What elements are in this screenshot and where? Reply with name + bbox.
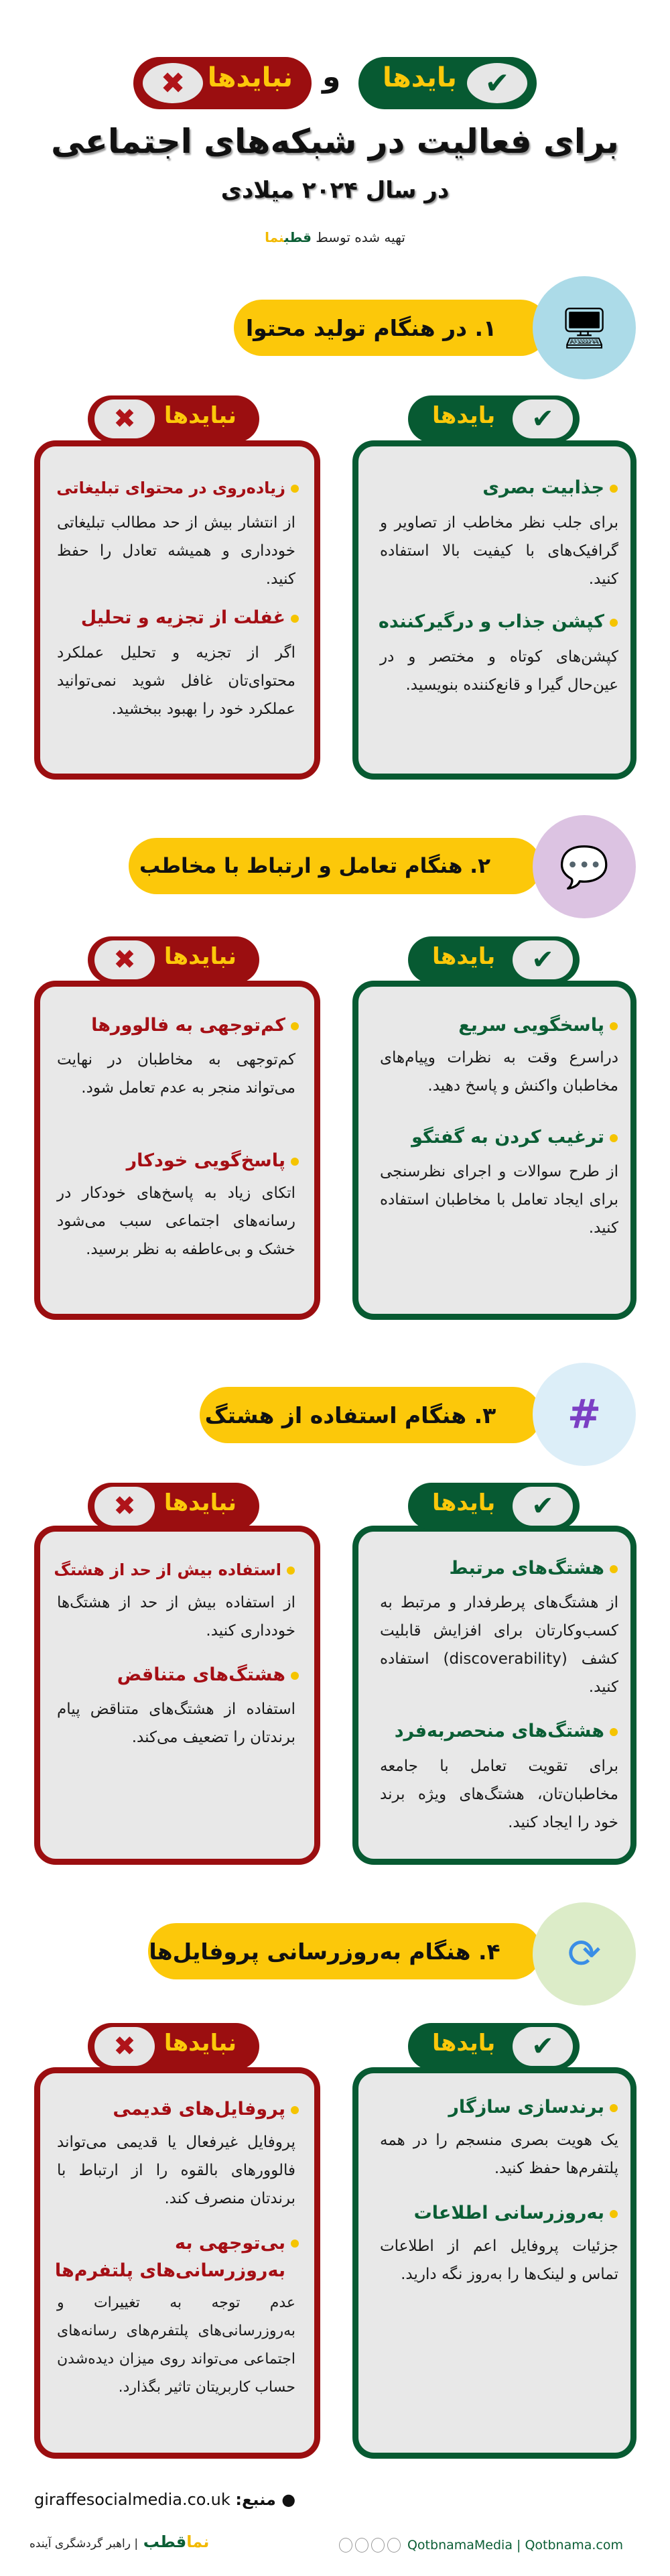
pill: dos: ✔ bbox=[485, 66, 509, 101]
section 1 header bbox=[234, 276, 636, 379]
panel: section 1 dos: کپشن جذاب و درگیرکننده bbox=[379, 611, 604, 632]
panel: section 4 donts: نبایدها bbox=[164, 2030, 237, 2057]
panel: section 2 dos: بایدها bbox=[432, 943, 495, 970]
text: and: و bbox=[322, 60, 340, 94]
pill: dos: بایدها bbox=[383, 62, 457, 93]
panel: section 1 donts: غفلت از تجزیه و تحلیل bbox=[81, 607, 285, 628]
section 1 header: ۱. در هنگام تولید محتوا bbox=[246, 315, 496, 341]
section 3 header bbox=[200, 1363, 636, 1466]
panel: section 1 donts: زیاده‌روی در محتوای تبلیغاتی bbox=[56, 479, 285, 497]
panel: section 2 dos bbox=[352, 936, 636, 1320]
panel: section 4 dos: یک هویت بصری منسجم را در همه پلتفرم‌ها حفظ کنید. bbox=[380, 2132, 618, 2177]
panel: section 1 dos: کپشن‌های کوتاه و مختصر و در عین‌حال گیرا و قانع‌کننده بنویسید. bbox=[380, 648, 618, 694]
panel: section 4 dos: بایدها bbox=[432, 2030, 495, 2057]
panel: section 2 donts: کم‌توجهی به مخاطبان در نهایت می‌تواند منجر به عدم تعامل شود. bbox=[57, 1051, 295, 1097]
section 4 header bbox=[148, 1902, 636, 2006]
subtitle: در سال ۲۰۲۴ میلادی bbox=[221, 177, 449, 204]
panel: section 4 donts: پروفایل غیرفعال یا قدیمی می‌تواند فالوورهای بالقوه را از ارتباط با برندتان منصرف کند. bbox=[57, 2134, 295, 2207]
icon: content: 🖥 bbox=[559, 304, 610, 351]
panel: section 4 donts: به‌روزرسانی‌های پلتفرم‌ها bbox=[55, 2260, 285, 2281]
section 4 header: ۴. هنگام به‌روزرسانی پروفایل‌ها bbox=[149, 1939, 500, 1964]
section 3 header: ۳. هنگام استفاده از هشتگ bbox=[205, 1402, 496, 1428]
panel: section 1 dos bbox=[352, 395, 636, 780]
panel: section 3 dos: ✔ bbox=[531, 1491, 554, 1522]
panel: section 3 donts: هشتگ‌های متناقض bbox=[117, 1664, 285, 1685]
icon: content bbox=[533, 276, 636, 379]
panel: section 4 donts: عدم توجه به تغییرات و به‌روزرسانی‌های پلتفرم‌های رسانه‌های اجتماعی می‌تواند روی میزان دیده‌شدن حساب کاربریتان تاثیر بگذارد. bbox=[57, 2294, 295, 2396]
pill: donts bbox=[133, 57, 312, 109]
pill: donts: ✖ bbox=[161, 66, 185, 101]
panel: section 2 donts: نبایدها bbox=[164, 943, 237, 970]
panel: section 1 donts: نبایدها bbox=[164, 402, 237, 429]
panel: section 3 dos: هشتگ‌های منحصربه‌فرد bbox=[395, 1721, 604, 1741]
footer: social links: QotbnamaMedia | Qotbnama.com bbox=[407, 2538, 623, 2553]
panel: section 4 donts: ✖ bbox=[113, 2031, 136, 2062]
panel: section 1 dos: بایدها bbox=[432, 402, 495, 429]
panel: section 3 dos: برای تقویت تعامل با جامعه مخاطبان‌تان، هشتگ‌های ویژه برند خود را ایجاد کنید. bbox=[380, 1758, 618, 1831]
icon: hashtag phone bbox=[533, 1363, 636, 1466]
panel: section 4 dos: به‌روزرسانی اطلاعات bbox=[414, 2203, 604, 2223]
panel: section 2 donts: پاسخ‌گویی خودکار bbox=[127, 1150, 285, 1171]
panel: section 4 dos: جزئیات پروفایل اعم از اطلاعات تماس و لینک‌ها را به‌روز نگه دارید. bbox=[380, 2237, 618, 2283]
section 2 header: ۲. هنگام تعامل و ارتباط با مخاطب bbox=[139, 854, 490, 878]
panel: section 3 donts: استفاده بیش از حد از هشتگ bbox=[54, 1560, 281, 1579]
icon: engagement: 💬 bbox=[559, 843, 609, 890]
panel: section 1 donts: از انتشار بیش از حد مطالب تبلیغاتی خودداری و همیشه تعادل را حفظ کنید. bbox=[57, 514, 295, 588]
panel: section 4 dos: برندسازی سازگار bbox=[448, 2097, 604, 2118]
panel: section 3 donts: ✖ bbox=[113, 1491, 136, 1522]
panel: section 2 dos: از طرح سوالات و اجرای نظرسنجی برای ایجاد تعامل با مخاطبان استفاده کنید. bbox=[380, 1163, 618, 1237]
panel: section 1 donts: اگر از تجزیه و تحلیل عملکرد محتوای‌تان غافل شوید نمی‌توانید عملکرد خود را بهبود ببخشید. bbox=[57, 644, 295, 718]
panel: section 3 donts: از استفاده بیش از حد از هشتگ‌ها خودداری کنید. bbox=[57, 1594, 295, 1640]
panel: section 1 donts: ✖ bbox=[113, 404, 136, 434]
panel: section 1 dos: برای جلب نظر مخاطب از تصاویر و گرافیک‌های با کیفیت بالا استفاده کنید. bbox=[380, 514, 618, 588]
panel: section 4 dos: ✔ bbox=[531, 2031, 554, 2062]
panel: section 1 dos: جذابیت بصری bbox=[482, 477, 604, 498]
panel: section 4 donts: پروفایل‌های قدیمی bbox=[113, 2099, 285, 2120]
panel: section 2 donts: کم‌توجهی به فالوورها bbox=[91, 1015, 285, 1036]
panel: section 2 dos: ✔ bbox=[531, 944, 554, 975]
panel: section 3 donts bbox=[34, 1483, 320, 1865]
panel: section 2 donts: اتکای زیاد به پاسخ‌های خودکار در رسانه‌های اجتماعی سبب می‌شود خشک و بی‌عاطفه به نظر برسید. bbox=[57, 1184, 295, 1258]
icon: engagement bbox=[533, 815, 636, 918]
title: برای فعالیت در شبکه‌های اجتماعی bbox=[51, 122, 619, 161]
pill: dos bbox=[358, 57, 537, 109]
panel: section 4 donts bbox=[34, 2023, 320, 2459]
panel: section 2 donts: ✖ bbox=[113, 944, 136, 975]
panel: section 3 dos: بایدها bbox=[432, 1489, 495, 1516]
footer: logo and tagline: نماقطب | راهبر گردشگری آینده bbox=[29, 2532, 209, 2551]
panel: section 3 donts: نبایدها bbox=[164, 1489, 237, 1516]
panel: section 3 donts: استفاده از هشتگ‌های متناقض پیام برندتان را تضعیف می‌کند. bbox=[57, 1701, 295, 1746]
icon: profile refresh: ⟳ bbox=[567, 1930, 601, 1977]
credit: تهیه شده توسط قطبنما bbox=[265, 229, 405, 245]
panel: section 2 donts bbox=[34, 936, 320, 1320]
source: giraffesocialmedia.co.uk :منبع ● bbox=[34, 2490, 295, 2509]
panel: section 2 dos: دراسرع وقت به نظرات وپیام‌های مخاطبان واکنش و پاسخ دهید. bbox=[380, 1049, 618, 1095]
panel: section 1 donts bbox=[34, 395, 320, 780]
pill: donts: نبایدها bbox=[208, 62, 293, 93]
panel: section 4 dos bbox=[352, 2023, 636, 2459]
panel: section 2 dos: ترغیب کردن به گفتگو bbox=[411, 1127, 604, 1148]
panel: section 3 dos: هشتگ‌های مرتبط bbox=[450, 1558, 604, 1579]
panel: section 3 dos bbox=[352, 1483, 636, 1865]
header: dos and donts pills bbox=[133, 57, 537, 109]
panel: section 3 dos: از هشتگ‌های پرطرفدار و مرتبط به کسب‌وکارتان برای افزایش قابلیت کشف (discoverability) استفاده کنید. bbox=[380, 1594, 618, 1696]
icon: profile refresh bbox=[533, 1902, 636, 2006]
panel: section 2 dos: پاسخگویی سریع bbox=[458, 1015, 604, 1036]
section 2 header bbox=[129, 815, 636, 918]
panel: section 1 dos: ✔ bbox=[531, 404, 554, 434]
panel: section 4 donts: بی‌توجهی به bbox=[175, 2233, 285, 2254]
icon: hashtag phone: # bbox=[567, 1391, 601, 1438]
